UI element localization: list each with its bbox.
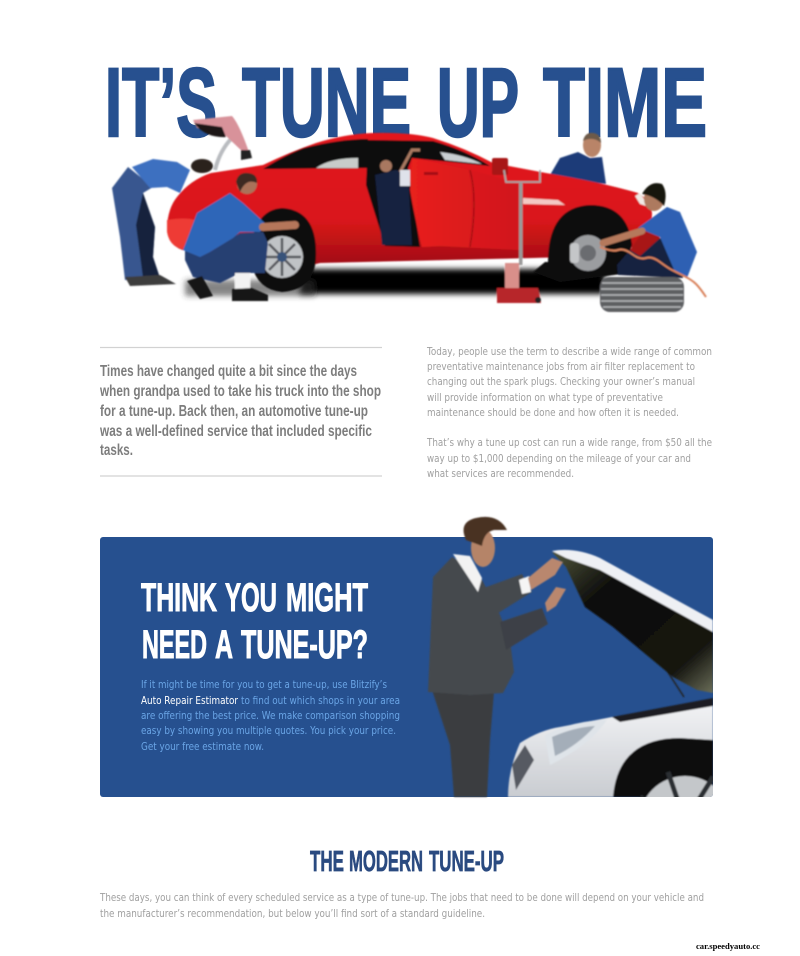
air hose <box>600 247 706 297</box>
panel heading: THINK <box>141 576 217 620</box>
rear light <box>167 218 195 250</box>
intro body text: Today, people use the term to describe a wide range of common <box>426 347 712 358</box>
intro pull quote <box>99 348 382 476</box>
section heading: the modern tune-up <box>310 846 504 878</box>
panel heading: MIGHT <box>286 576 368 620</box>
open door <box>410 158 520 250</box>
panel body text: are offering the best price. We make comparison shopping <box>141 711 400 722</box>
crouching mechanic at rear wheel <box>183 173 295 301</box>
fender highlight <box>523 198 565 205</box>
section intro text: These days, you can think of every scheduled service as a type of tune-up. The jobs that need to be done will depend on your vehicle and <box>99 893 704 904</box>
section heading: the modern tune-up: TUNE-UP <box>429 846 504 878</box>
title: TIME <box>543 48 707 157</box>
section heading: the modern tune-up: THE <box>310 846 344 878</box>
panel heading: YOU <box>225 576 277 620</box>
intro pull quote: when grandpa used to take his truck into the shop <box>99 383 381 400</box>
open trunk lid <box>193 116 252 170</box>
title: IT’S <box>105 48 217 157</box>
car body <box>167 133 652 268</box>
intro body text: way up to $1,000 depending on the mileage of your car and <box>427 454 691 465</box>
panel body text: Get your free estimate now. <box>141 742 264 753</box>
shirt collar <box>453 554 482 592</box>
panel heading: TUNE-UP? <box>241 623 368 667</box>
title: UP <box>437 48 519 157</box>
intro body text: changing out the spark plugs. Checking your owner’s manual <box>427 377 695 388</box>
lower sleeve <box>500 608 548 650</box>
mechanic at front wheel <box>603 183 697 278</box>
panel body text: to find out which shops in your area <box>241 696 400 707</box>
intro pull quote: Times have changed quite a bit since the days <box>100 363 357 380</box>
mechanic at trunk <box>112 159 213 286</box>
panel body text <box>141 680 400 753</box>
intro body text: will provide information on what type of preventative <box>427 393 663 404</box>
panel body text: Auto Repair Estimator <box>141 696 239 707</box>
title <box>105 48 707 157</box>
spare tyre <box>600 277 684 312</box>
intro body text: That’s why a tune up cost can run a wide range, from $50 all the <box>426 438 712 449</box>
headlight <box>635 193 649 207</box>
front wheel arch <box>533 205 632 282</box>
section intro text <box>99 893 704 920</box>
intro body text: preventative maintenance jobs from air filter replacement to <box>427 362 695 373</box>
side windows <box>263 139 368 169</box>
hands <box>528 558 563 590</box>
hero illustration: red car with mechanics <box>112 116 706 312</box>
panel: tune-up call to action <box>100 516 713 798</box>
door opening with interior <box>366 140 490 247</box>
intro pull quote: tasks. <box>100 442 133 459</box>
white car with raised hood <box>507 548 713 797</box>
intro pull quote: was a well-defined service that included specific <box>99 423 372 440</box>
panel body text: easy by showing you multiple quotes. You pick your price. <box>141 726 396 737</box>
panel heading: A <box>215 623 233 667</box>
man inspecting the engine <box>428 517 566 797</box>
intro body text: maintenance should be done and how often it is needed. <box>427 408 679 419</box>
head <box>471 529 495 567</box>
wing mirror <box>492 158 508 175</box>
watermark: car.speedyauto.cc <box>696 942 760 951</box>
front brake disc <box>570 235 606 271</box>
upper sleeve <box>465 565 532 620</box>
title: TUNE <box>242 48 411 157</box>
intro body text: what services are recommended. <box>427 469 574 480</box>
rear wheel <box>250 208 316 292</box>
intro pull quote: for a tune-up. Back then, an automotive tune-up <box>100 403 368 420</box>
jack <box>497 170 541 303</box>
panel body text: If it might be time for you to get a tune-up, use Blitzify’s <box>141 680 387 691</box>
jacket <box>428 557 514 695</box>
intro body text <box>426 347 712 480</box>
section heading: the modern tune-up: MODERN <box>349 846 423 878</box>
trousers <box>432 690 494 797</box>
car shadow <box>185 269 605 296</box>
section intro text: the manufacturer’s recommendation, but below you’ll find sort of a standard guideline. <box>100 909 485 920</box>
panel heading <box>141 576 368 667</box>
mechanic behind the car <box>550 133 606 184</box>
panel heading: NEED <box>142 623 207 667</box>
